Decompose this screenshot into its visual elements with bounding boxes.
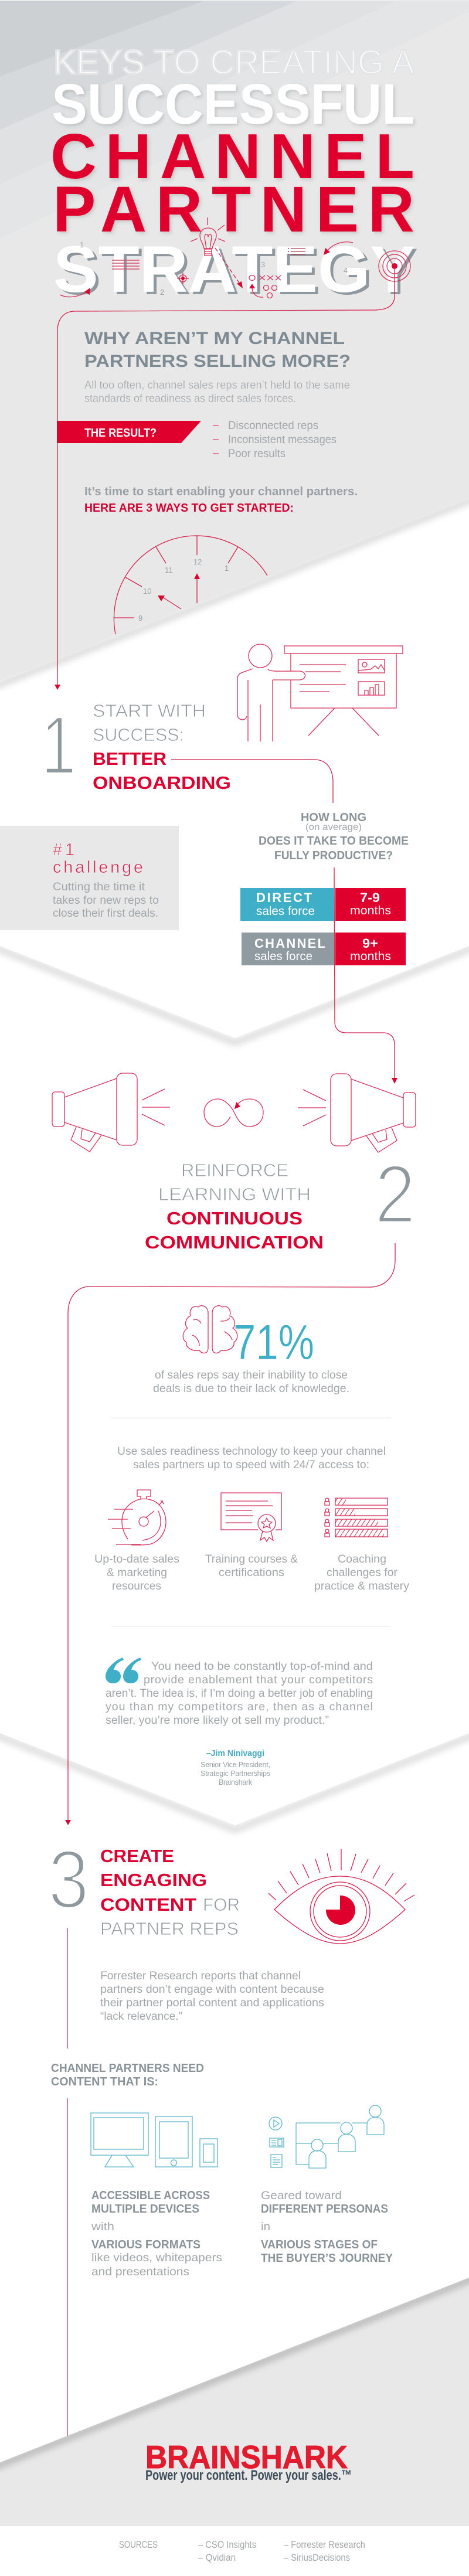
strategy doodle icons: 3: [261, 260, 265, 269]
stat row: channel sales force: sales force: [254, 950, 312, 963]
list: result items: Disconnected reps: [228, 419, 318, 432]
stat row: direct sales force: sales force: [256, 905, 315, 918]
icon: crosshair: [177, 273, 189, 284]
heading: create engaging content: CREATE: [100, 1846, 174, 1866]
quote text: aren’t. The idea is, if I’m doing a better job of enabling: [106, 1687, 373, 1700]
heading: create engaging content: ENGAGING: [100, 1870, 207, 1890]
quote attribution: [200, 1748, 270, 1786]
icon: clock: 12: [193, 557, 202, 566]
title lines with soft shadow: [50, 72, 414, 246]
subheading: channel partners need: [51, 2062, 204, 2088]
labels: access features: & marketing: [107, 1566, 167, 1579]
text block: why aren't my channel partners selling more: standards of readiness as direct sales forces.: [84, 392, 296, 405]
quote text: seller, you’re more likely ot sell my product.”: [106, 1714, 329, 1727]
text column: devices and formats: VARIOUS FORMATS: [91, 2238, 200, 2251]
panel: grey header section: [0, 0, 469, 680]
heading: start with success: ONBOARDING: [93, 773, 231, 793]
title: [50, 43, 415, 306]
text column: personas and stages: VARIOUS STAGES OF: [261, 2238, 378, 2251]
text block: why aren't my channel partners selling more: WHY AREN’T MY CHANNEL: [84, 329, 345, 348]
text block: time to start: It’s time to start enabling your channel partners.: [84, 485, 358, 498]
stat: 71 percent: [153, 1315, 349, 1395]
icon: quote mark: [106, 1658, 141, 1683]
icon: playbook: [249, 275, 281, 298]
icon: personas and formats: [269, 2105, 384, 2168]
chevron divider 2 shadow: [0, 1641, 469, 1830]
title line: keys to creating a: KEYS TO CREATING A: [53, 43, 414, 81]
text block: forrester research: [100, 1969, 324, 2023]
heading: start with success: BETTER: [93, 748, 166, 769]
text block: forrester research: “lack relevance.”: [100, 2010, 182, 2023]
icon: light bulb: [191, 217, 225, 256]
text column: devices and formats: [91, 2189, 222, 2278]
heading: create engaging content: FOR: [203, 1894, 240, 1915]
step 2 numeral: 2: [375, 1148, 416, 1240]
top edge shadow: [0, 496, 469, 689]
panel: number one challenge: Cutting the time it: [53, 880, 145, 893]
list: result items: Inconsistent messages: [228, 433, 337, 446]
quote text: [106, 1660, 373, 1727]
connector: target to step 1: [55, 267, 395, 690]
heading: start with success: [93, 700, 231, 793]
quote attribution: Strategic Partnerships: [200, 1769, 270, 1778]
text block: how long: DOES IT TAKE TO BECOME: [259, 835, 409, 848]
dashed arrow: [215, 248, 241, 285]
text block: sales readiness: Use sales readiness technology to keep your channel: [117, 1445, 386, 1458]
logo: brainshark: BRAINSHARK: [145, 2439, 348, 2475]
heading: reinforce learning: LEARNING WITH: [158, 1184, 311, 1204]
logo: brainshark: Power your content. Power your sales.™: [145, 2468, 352, 2483]
strategy doodle icons: 4: [344, 266, 348, 275]
text block: sales readiness: [117, 1445, 386, 1471]
labels: access features: challenges for: [327, 1566, 397, 1579]
quote attribution: –Jim Ninivaggi: [206, 1748, 264, 1758]
text block: how long: (on average): [305, 822, 362, 832]
labels: access features: Training courses &: [205, 1553, 298, 1566]
text block: time to start: HERE ARE 3 WAYS TO GET STARTED:: [84, 502, 294, 515]
text column: personas and stages: in: [261, 2220, 270, 2233]
stat: 71 percent: 71%: [233, 1315, 314, 1370]
sources: – SiriusDecisions: [284, 2552, 350, 2563]
text column: devices and formats: and presentations: [91, 2265, 189, 2278]
heading: start with success: START WITH: [93, 700, 206, 721]
text block: time to start: [84, 485, 358, 515]
heading: reinforce learning: [145, 1160, 324, 1253]
labels: access features: [94, 1553, 409, 1592]
text column: personas and stages: DIFFERENT PERSONAS: [261, 2203, 388, 2216]
stat row: direct sales force: DIRECT: [256, 890, 312, 905]
icon: clock: 9: [138, 614, 142, 622]
chevron divider 1 shadow: [0, 879, 469, 1043]
connector: how long to step 2: [334, 867, 397, 1084]
strategy doodle icons: 2: [160, 288, 164, 297]
title lines with soft shadow: PARTNER: [53, 173, 414, 246]
connector: step 2 to step 3: [65, 1243, 395, 1825]
title lines with soft shadow: SUCCESSFUL: [52, 72, 414, 136]
side rule lower: [67, 2098, 68, 2436]
text block: why aren't my channel partners selling more: PARTNERS SELLING MORE?: [84, 352, 351, 371]
stat: 71 percent: deals is due to their lack of knowledge.: [153, 1382, 349, 1395]
icon: certificate: [221, 1493, 281, 1541]
icon: eye: [269, 1849, 414, 1944]
panel: number one challenge: close their first deals.: [53, 907, 158, 920]
stat row: channel sales force: [242, 933, 406, 965]
list: result items: Poor results: [228, 447, 286, 460]
icon: clock: 11: [165, 566, 172, 574]
text column: devices and formats: like videos, whitepapers: [91, 2251, 222, 2264]
callout: the result: [57, 421, 201, 443]
text column: devices and formats: with: [91, 2220, 114, 2233]
icon: clock: [114, 536, 267, 634]
quote text: provide enablement that your competitors: [144, 1673, 373, 1686]
text column: devices and formats: ACCESSIBLE ACROSS: [91, 2189, 210, 2202]
side rule upper: [67, 1928, 68, 2048]
labels: access features: Coaching: [338, 1553, 386, 1566]
connector: onboarding to how long: [171, 760, 333, 803]
icon: right megaphone: [298, 1074, 416, 1152]
text block: how long: [259, 811, 409, 862]
quote text: you than my competitors are, then as a channel: [106, 1700, 373, 1713]
panel: number one challenge: challenge: [53, 858, 143, 877]
text block: forrester research: their partner portal content and applications: [100, 1996, 324, 2009]
panel: number one challenge: #1: [53, 840, 74, 859]
stat row: direct sales force: [240, 888, 406, 921]
callout: the result: THE RESULT?: [84, 427, 157, 440]
heading: reinforce learning: CONTINUOUS: [166, 1208, 303, 1229]
panel: number one challenge: takes for new reps to: [53, 894, 159, 907]
icon: clock: 1: [225, 564, 229, 573]
text block: how long: HOW LONG: [301, 811, 366, 824]
labels: access features: resources: [112, 1580, 161, 1592]
strategy doodle icons: [60, 217, 410, 298]
labels: access features: practice & mastery: [314, 1580, 409, 1592]
text block: how long: FULLY PRODUCTIVE?: [274, 849, 393, 862]
sources: SOURCES: [119, 2539, 158, 2550]
title line: strategy: STRATEGY: [53, 233, 415, 306]
stat row: channel sales force: CHANNEL: [254, 936, 325, 951]
title lines with soft shadow: CHANNEL: [50, 121, 414, 192]
heading: create engaging content: PARTNER REPS: [100, 1918, 239, 1939]
heading: reinforce learning: COMMUNICATION: [145, 1232, 324, 1253]
curved arrows: [327, 242, 353, 251]
panel: grey footer section: [0, 2262, 469, 2576]
sources: – Forrester Research: [284, 2539, 365, 2550]
heading: reinforce learning: REINFORCE: [181, 1160, 288, 1180]
icon: infinity loop: [204, 1099, 263, 1127]
text block: forrester research: partners don’t engage with content because: [100, 1983, 324, 1996]
stat row: channel sales force: months: [350, 950, 391, 963]
heading: create engaging content: [100, 1846, 240, 1939]
step 3 numeral: 3: [48, 1833, 89, 1925]
subheading: channel partners need: CONTENT THAT IS:: [51, 2075, 158, 2088]
text block: sales readiness: sales partners up to speed with 24/7 access to:: [133, 1458, 369, 1471]
text column: personas and stages: THE BUYER’S JOURNEY: [261, 2252, 393, 2265]
icon: stripes: [112, 260, 140, 269]
text column: personas and stages: [261, 2189, 393, 2265]
panel: number one challenge: [0, 826, 179, 930]
stat row: channel sales force: 9+: [362, 936, 378, 951]
heading: create engaging content: CONTENT: [100, 1894, 196, 1915]
subheading: channel partners need: CHANNEL PARTNERS NEED: [51, 2062, 204, 2075]
text column: devices and formats: MULTIPLE DEVICES: [91, 2203, 199, 2216]
side rule lower end: [67, 2403, 68, 2436]
icon: presenter at board: [237, 644, 403, 741]
text block: forrester research: Forrester Research reports that channel: [100, 1969, 301, 1982]
quote attribution: Brainshark: [219, 1778, 253, 1786]
stat row: direct sales force: 7-9: [360, 890, 380, 905]
text block: why aren't my channel partners selling more: All too often, channel sales reps aren’t held to the same: [84, 379, 350, 392]
quote attribution: Senior Vice President,: [200, 1761, 270, 1769]
text block: why aren't my channel partners selling more: [84, 329, 351, 405]
icon: target: [379, 251, 410, 281]
icon: coaching progress bars: [325, 1498, 388, 1537]
icon: clock: 10: [143, 587, 151, 595]
icon: brain: [183, 1306, 237, 1353]
step 1 numeral: 1: [41, 699, 76, 791]
quote text: You need to be constantly top-of-mind and: [151, 1660, 373, 1673]
stat row: direct sales force: months: [350, 904, 391, 917]
icon: stopwatch: [108, 1490, 166, 1545]
sources: – Qvidian: [198, 2552, 236, 2563]
heading: start with success: SUCCESS:: [93, 724, 184, 745]
stat: 71 percent: of sales reps say their inability to close: [155, 1369, 348, 1381]
labels: access features: Up-to-date sales: [94, 1553, 179, 1566]
labels: access features: certifications: [219, 1566, 284, 1579]
icon: list: [291, 249, 305, 254]
text column: personas and stages: Geared toward: [261, 2189, 342, 2202]
sources: – CSO Insights: [198, 2539, 256, 2550]
list: result items: [213, 419, 337, 460]
sources: [119, 2539, 365, 2563]
strategy doodle icons: 1: [80, 240, 84, 249]
icon: devices: [91, 2113, 217, 2167]
icon: left megaphone: [52, 1073, 170, 1152]
